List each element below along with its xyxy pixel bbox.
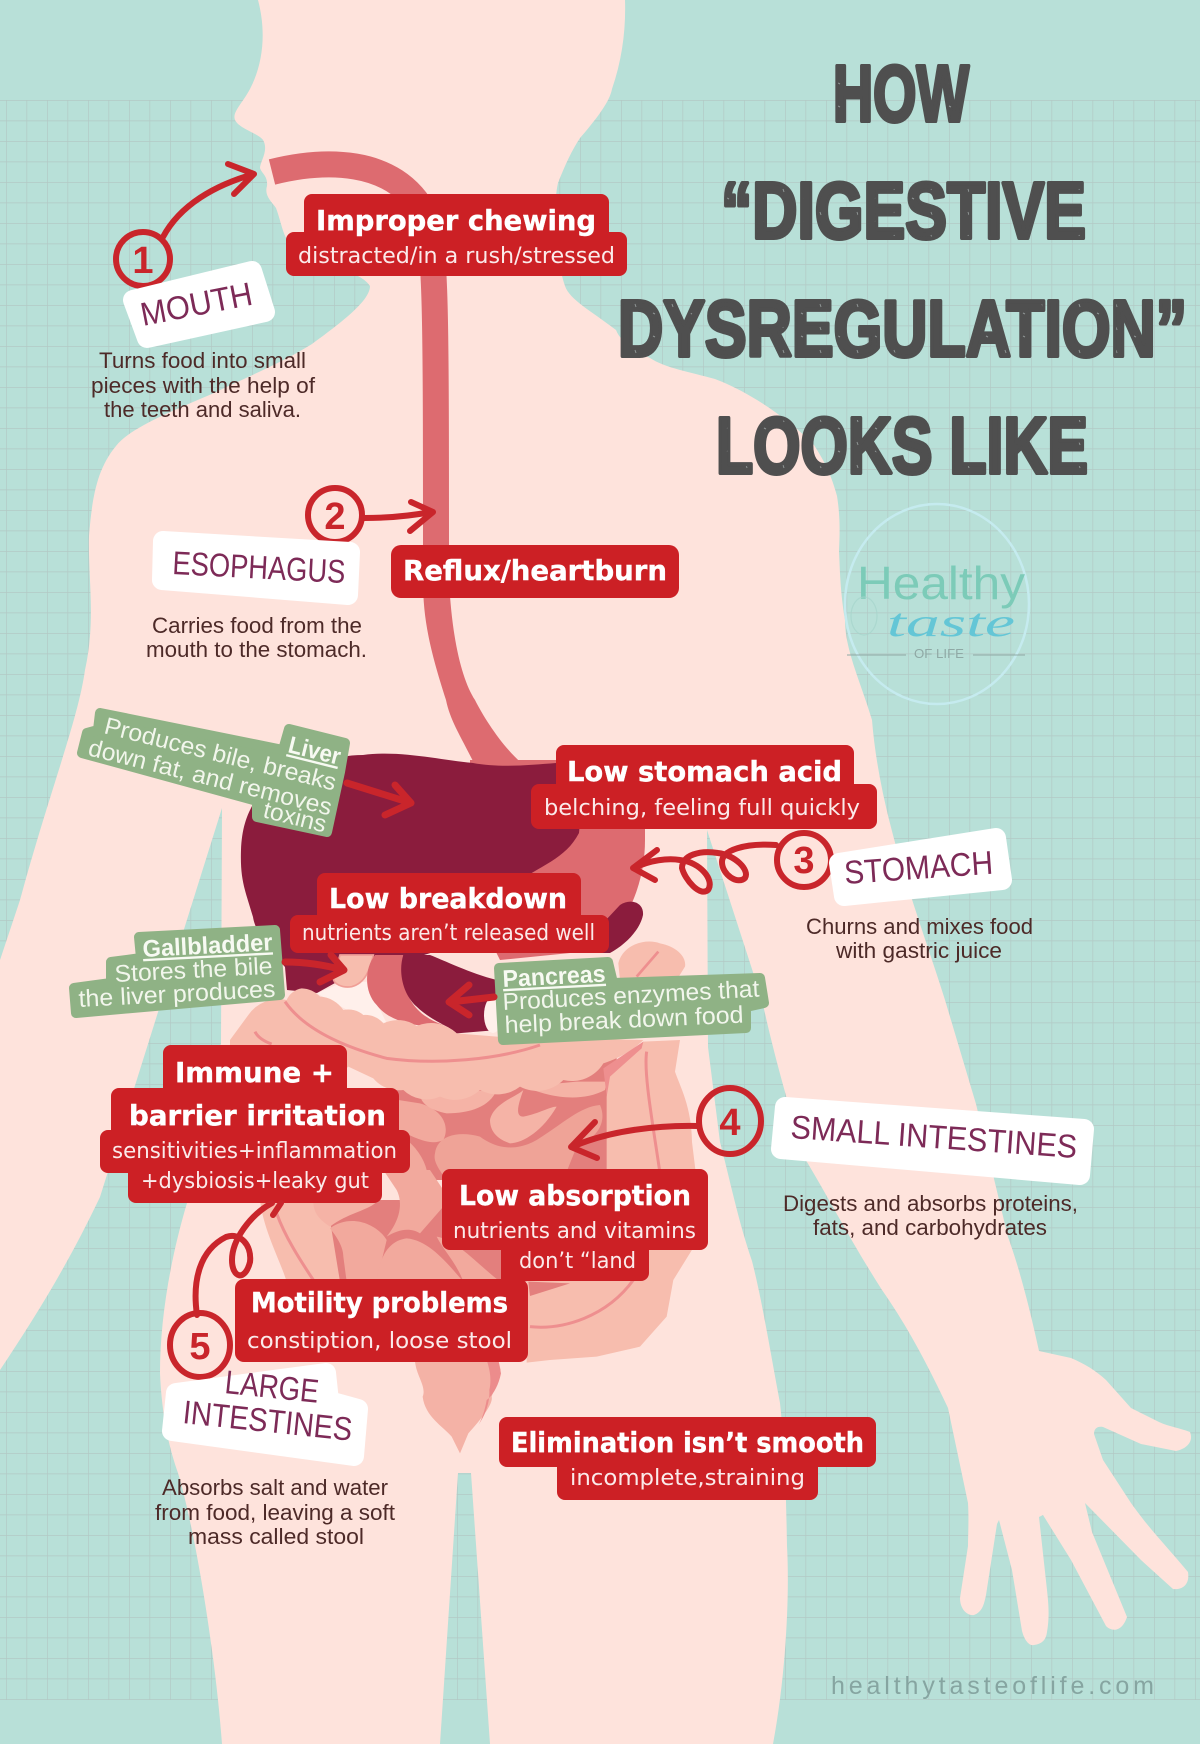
liver [241, 754, 579, 993]
callout: low breakdown: Low breakdown [329, 883, 567, 915]
spleen [575, 902, 643, 953]
green label: pancreas: Produces enzymes that [502, 976, 760, 1016]
description: small intestines: Digests and absorbs proteins, [783, 1191, 1078, 1216]
esophagus [272, 164, 524, 765]
description: esophagus: Carries food from the [152, 613, 362, 638]
title: HOW [833, 49, 969, 138]
small intestine base [327, 1200, 530, 1282]
left colon [260, 1200, 345, 1282]
logo: OF LIFE [914, 646, 964, 661]
descending colon [607, 1040, 697, 1180]
arrow: pancreas [449, 985, 494, 1015]
callout: immune and barrier: +dysbiosis+leaky gut [141, 1169, 369, 1194]
step 2: esophagus: 2 [324, 496, 346, 538]
callout: low breakdown [290, 873, 609, 953]
step 4: small intestines [571, 1088, 1084, 1175]
green label: pancreas [499, 961, 764, 1040]
description: esophagus [146, 613, 367, 662]
description: esophagus: mouth to the stomach. [146, 637, 367, 662]
callout: low stomach acid [531, 745, 877, 829]
callout: motility: Motility problems [251, 1287, 508, 1319]
description: small intestines [783, 1191, 1078, 1240]
callout: low absorption: nutrients and vitamins [453, 1219, 696, 1244]
small intestine base [390, 1053, 617, 1180]
arrow: liver [347, 783, 411, 815]
callout: low absorption: Low absorption [459, 1180, 691, 1212]
step 4: small intestines: 4 [719, 1102, 741, 1144]
description: stomach: with gastric juice [835, 938, 1002, 963]
step 5: large intestines: 5 [189, 1326, 211, 1368]
rectum [415, 1360, 501, 1453]
title: LOOKS LIKE [716, 401, 1088, 490]
title [618, 49, 1187, 490]
callout: improper chewing: distracted/in a rush/stressed [298, 244, 615, 269]
step 3: stomach [633, 833, 1002, 896]
callout: motility: constiption, loose stool [247, 1329, 512, 1354]
green label: liver: Liver [286, 732, 344, 771]
step 1: mouth: MOUTH [137, 275, 255, 333]
step 2: esophagus [162, 488, 433, 595]
logo: Healthy [857, 557, 1025, 609]
colon creases [255, 1002, 540, 1061]
small intestine lumps [313, 1170, 500, 1282]
callout: immune and barrier: barrier irritation [129, 1100, 386, 1132]
intestines lower [260, 1170, 696, 1453]
step 5: large intestines: INTESTINES [181, 1393, 354, 1448]
duodenum [367, 955, 443, 1026]
green label: gallbladder: Gallbladder [142, 929, 273, 963]
callout: immune and barrier: sensitivities+inflammation [112, 1139, 397, 1164]
green label: gallbladder [74, 929, 280, 1013]
description: mouth: pieces with the help of [91, 373, 316, 398]
callout: improper chewing: Improper chewing [316, 205, 596, 237]
intestines upper [230, 942, 697, 1180]
green label: pancreas: Pancreas [502, 961, 606, 993]
green label: liver [82, 713, 345, 838]
step 3: stomach: 3 [793, 840, 815, 882]
callout: immune and barrier [100, 1045, 410, 1203]
small intestine lumps [398, 1082, 607, 1180]
callout: elimination: Elimination isn’t smooth [511, 1427, 864, 1459]
description: stomach [806, 914, 1033, 963]
description: mouth [91, 348, 316, 422]
description: large intestines [155, 1475, 395, 1549]
callout: motility [235, 1279, 528, 1362]
arrow: gallbladder [285, 955, 344, 982]
logo: taste [887, 600, 1015, 645]
green label: gallbladder: Stores the bile [114, 953, 273, 988]
description: large intestines: Absorbs salt and water [162, 1475, 388, 1500]
step 3: stomach: STOMACH [843, 844, 994, 891]
green label: gallbladder: the liver produces [78, 976, 276, 1013]
pancreas gap spot [484, 997, 502, 1033]
right colon [527, 1243, 696, 1363]
green label: pancreas: help break down food [504, 1002, 744, 1039]
website: healthytasteoflife.com [831, 1672, 1154, 1700]
step 5: large intestines [170, 1203, 358, 1456]
colon top loop [618, 942, 685, 980]
step 1: mouth [116, 164, 265, 338]
green label: liver: down fat, and removes [86, 735, 335, 821]
gallbladder organ [333, 955, 373, 987]
callout: reflux [391, 545, 679, 598]
callout: low absorption: don’t “land [519, 1249, 636, 1274]
green label: liver: Produces bile, breaks [102, 713, 339, 796]
green label: liver: toxins [261, 797, 329, 838]
callout: elimination [499, 1417, 876, 1500]
transverse colon [230, 988, 643, 1173]
callout: immune and barrier: Immune + [175, 1057, 334, 1089]
step 1: mouth: 1 [132, 240, 154, 282]
stomach [470, 760, 645, 960]
callout: improper chewing [286, 194, 627, 276]
callout: low breakdown: nutrients aren’t released well [302, 921, 595, 946]
step 5: large intestines: LARGE [223, 1363, 321, 1410]
callout: low absorption [442, 1169, 708, 1281]
logo [845, 504, 1029, 704]
description: stomach: Churns and mixes food [806, 914, 1033, 939]
pale gap [317, 982, 387, 1023]
callout: low stomach acid: belching, feeling full quickly [544, 796, 860, 821]
callout: elimination: incomplete,straining [570, 1466, 805, 1491]
callout: reflux: Reflux/heartburn [403, 555, 667, 587]
step 2: esophagus: ESOPHAGUS [172, 544, 346, 590]
description: mouth: the teeth and saliva. [104, 397, 301, 422]
pancreas organ [401, 955, 497, 1033]
description: large intestines: from food, leaving a soft [155, 1500, 395, 1525]
description: small intestines: fats, and carbohydrates [813, 1215, 1047, 1240]
callout: low stomach acid: Low stomach acid [567, 756, 842, 788]
title: “DIGESTIVE [721, 166, 1086, 255]
step 4: small intestines: SMALL INTESTINES [790, 1108, 1078, 1165]
description: large intestines: mass called stool [188, 1524, 364, 1549]
description: mouth: Turns food into small [99, 348, 306, 373]
